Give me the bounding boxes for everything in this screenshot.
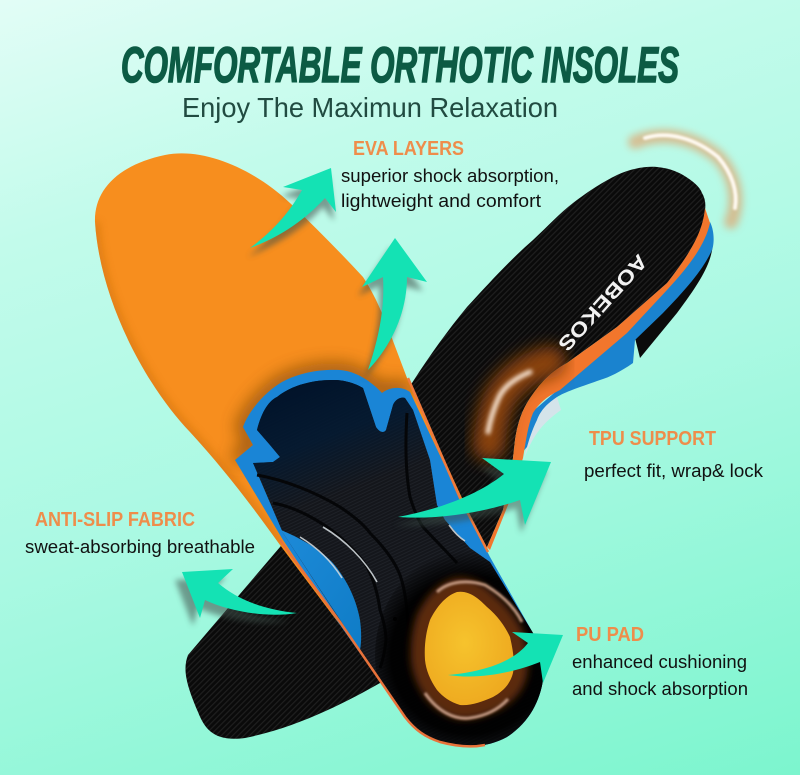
back insole: black sole seen from above xyxy=(185,167,714,739)
front insole: orange top, black and blue underside xyxy=(95,153,565,760)
callout: anti-slip fabric xyxy=(25,509,255,557)
back insole pale edge xyxy=(524,397,561,459)
callout: anti-slip fabric: ANTI-SLIP FABRIC xyxy=(35,509,195,531)
callout: TPU support: TPU SUPPORT xyxy=(589,428,716,450)
glossy highlights xyxy=(300,525,465,582)
back insole blue layer xyxy=(520,222,714,455)
back insole orange layer xyxy=(487,208,710,550)
brand label: AOBEKOS xyxy=(553,250,651,355)
callout: PU pad: enhanced cushioning xyxy=(572,652,747,672)
arrow: PU pad xyxy=(448,632,563,683)
arrow: EVA layers xyxy=(248,168,336,257)
small hole mark xyxy=(393,617,397,621)
arrow: toward orange foam xyxy=(358,238,427,379)
right orange rim xyxy=(408,378,488,552)
callout: EVA layers: lightweight and comfort xyxy=(341,191,541,211)
blue TPU layer xyxy=(235,370,544,746)
callout: EVA layers xyxy=(341,138,559,211)
subtitle: Enjoy The Maximun Relaxation xyxy=(182,92,558,123)
callout: PU pad: PU PAD xyxy=(576,624,644,646)
front insole orange foam xyxy=(95,153,487,625)
back insole black top surface xyxy=(185,167,705,739)
callout: EVA layers: EVA LAYERS xyxy=(353,138,464,160)
back insole lower black base xyxy=(635,240,713,358)
arrow: anti-slip fabric xyxy=(175,569,297,626)
callout: TPU support: perfect fit, wrap& lock xyxy=(584,461,764,481)
arrow: TPU support xyxy=(394,458,551,533)
grooves on underside xyxy=(257,413,457,690)
white highlight on arch xyxy=(488,372,530,432)
callout: PU pad: and shock absorption xyxy=(572,679,748,699)
orange foam shading xyxy=(95,222,410,545)
icon: curved glow arc at toe xyxy=(635,135,736,222)
blue arch insert xyxy=(281,530,361,650)
callout: TPU support xyxy=(584,428,764,481)
callout: anti-slip fabric: sweat-absorbing breathable xyxy=(25,537,255,557)
callout: PU pad xyxy=(572,624,748,699)
callout: EVA layers: superior shock absorption, xyxy=(341,166,559,186)
brown glow on arch xyxy=(489,362,550,445)
outer orange rim xyxy=(280,540,485,746)
black underside of heel and arch xyxy=(253,380,544,746)
dark navy fade at the top of the cavity xyxy=(253,380,437,560)
PU pad yellow xyxy=(425,592,514,705)
heel dark area with brown ring xyxy=(375,555,543,745)
